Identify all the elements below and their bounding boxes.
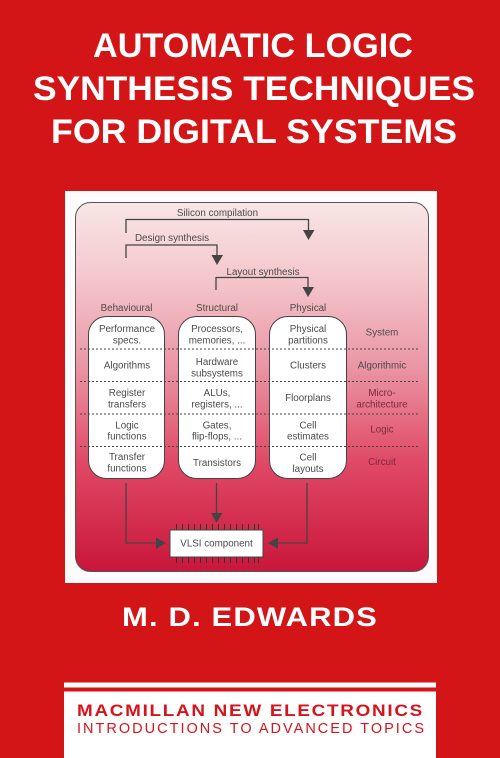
title: FOR DIGITAL SYSTEMS	[51, 113, 457, 151]
arrow: layout synthesis	[216, 267, 314, 297]
column: physical: Cell	[300, 420, 316, 432]
column: physical: Cell	[300, 452, 316, 464]
arrow: behavioural to VLSI	[126, 483, 166, 549]
column: structural: subsystems	[191, 368, 243, 380]
column: physical	[270, 303, 346, 478]
column: behavioural	[88, 303, 164, 478]
series band	[64, 682, 436, 758]
column: behavioural: transfers	[108, 400, 146, 410]
VLSI component: VLSI component	[180, 538, 253, 550]
title: SYNTHESIS TECHNIQUES	[33, 70, 475, 108]
arrow: physical to VLSI	[268, 483, 307, 549]
column: structural: Structural	[196, 303, 238, 314]
title: AUTOMATIC LOGIC	[93, 27, 413, 65]
gradient panel	[76, 202, 428, 572]
column: behavioural: functions	[107, 432, 147, 442]
level labels: Logic	[370, 424, 394, 436]
column: behavioural: specs.	[113, 336, 141, 346]
arrow: layout synthesis: Layout synthesis	[227, 267, 300, 278]
column: behavioural: Register	[109, 388, 146, 399]
level labels: Algorithmic	[358, 360, 406, 372]
VLSI component	[170, 524, 263, 563]
column: structural: ALUs,	[204, 388, 230, 399]
author: M. D. EDWARDS	[122, 602, 378, 632]
column: structural	[178, 303, 256, 478]
panel background	[65, 191, 437, 583]
column: physical: layouts	[292, 464, 324, 475]
column: structural: memories, ...	[189, 336, 245, 346]
column: structural: registers, ...	[191, 400, 243, 410]
column: physical: partitions	[288, 336, 328, 346]
column: structural: Processors,	[191, 324, 243, 335]
title	[33, 27, 475, 151]
column: structural: Hardware	[196, 357, 239, 368]
level labels: Micro-	[368, 388, 396, 399]
column: structural: Gates,	[203, 420, 231, 432]
column: physical: Physical	[290, 324, 326, 335]
arrow: design synthesis	[126, 233, 223, 265]
column: behavioural: Performance	[99, 324, 156, 335]
level labels: architecture	[356, 400, 408, 410]
arrow: silicon compilation	[126, 208, 314, 240]
level labels: Circuit	[368, 457, 396, 468]
column: physical: Clusters	[290, 360, 326, 372]
column: structural: Transistors	[193, 458, 241, 469]
column: structural: flip-flops, ...	[192, 432, 242, 442]
panel: diagram	[65, 191, 437, 583]
arrow: silicon compilation: Silicon compilation	[177, 208, 258, 219]
arrow: design synthesis: Design synthesis	[135, 233, 209, 244]
level labels	[356, 328, 408, 468]
column: behavioural: Transfer	[109, 452, 146, 463]
arrow: structural to VLSI	[211, 483, 222, 523]
column: behavioural: Logic	[115, 420, 139, 432]
series title: MACMILLAN NEW ELECTRONICS	[77, 702, 424, 720]
column: behavioural: functions	[107, 464, 147, 474]
column: physical: Floorplans	[285, 393, 331, 404]
column: behavioural: Algorithms	[104, 360, 150, 372]
column: behavioural: Behavioural	[101, 303, 152, 314]
column: physical: Physical	[290, 303, 326, 314]
column: physical: estimates	[287, 432, 329, 442]
series subtitle: INTRODUCTIONS TO ADVANCED TOPICS	[77, 721, 424, 737]
level labels: System	[366, 328, 398, 338]
